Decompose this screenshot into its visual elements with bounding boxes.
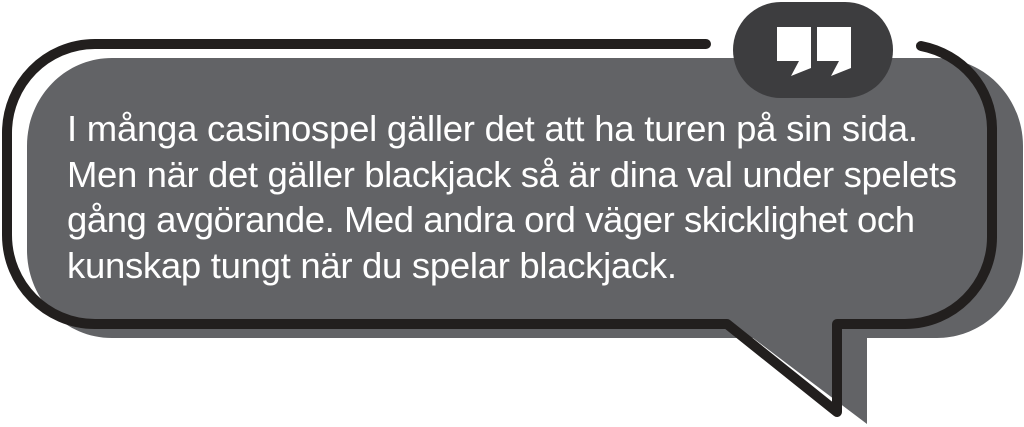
body text: kunskap tungt när du spelar blackjack. [67, 245, 677, 286]
quote badge [733, 2, 893, 98]
body text: gång avgörande. Med andra ord väger skicklighet och [67, 199, 915, 240]
body text [67, 108, 957, 286]
body text: I många casinospel gäller det att ha turen på sin sida. [67, 108, 918, 149]
body text: Men när det gäller blackjack så är dina val under spelets [67, 154, 957, 195]
icon: quotation marks [777, 27, 851, 76]
